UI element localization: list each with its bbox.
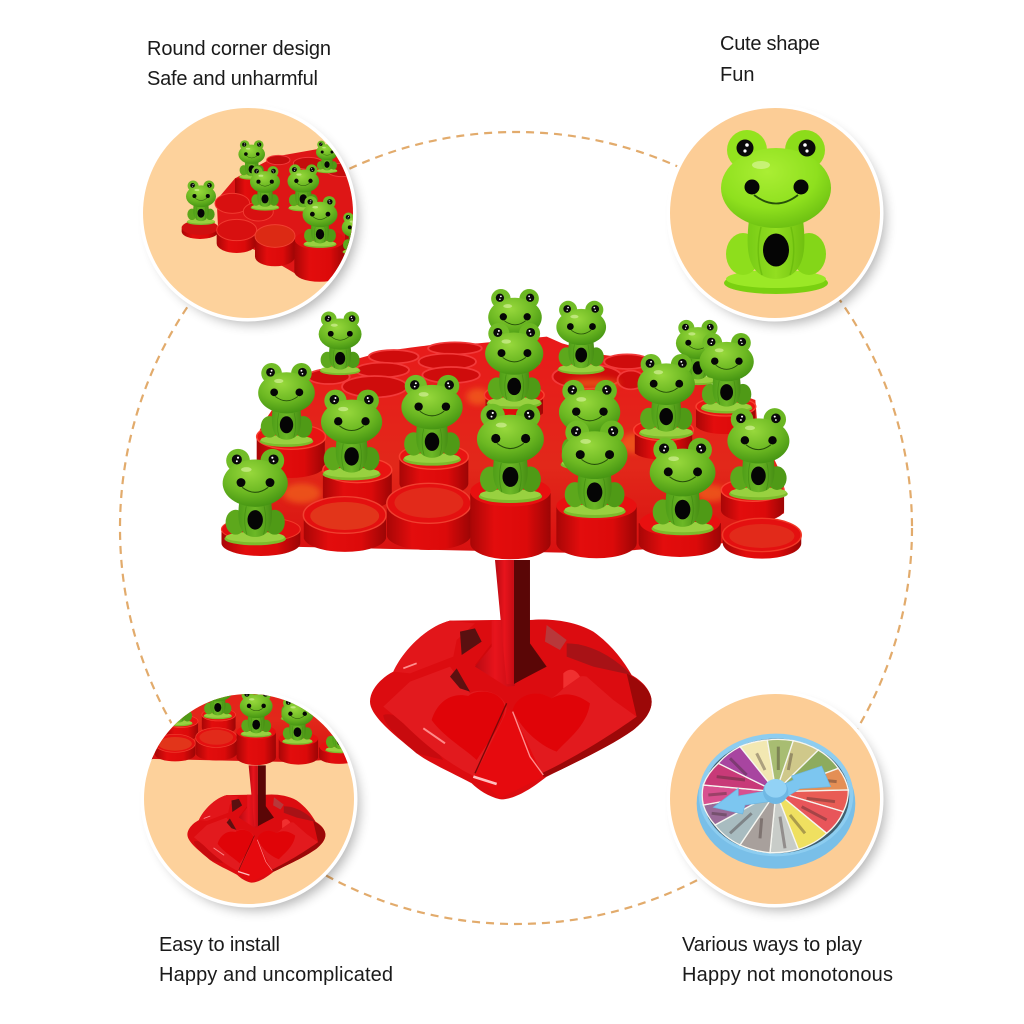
- caption: top right: Cute shape: [720, 33, 820, 55]
- front row cups: [221, 528, 300, 556]
- caption: top left: Safe and unharmful: [147, 68, 318, 90]
- caption: bottom right: Happy not monotonous: [682, 964, 893, 986]
- inset: various ways to play, spinner wheel: [666, 690, 885, 910]
- red honeycomb tray: [221, 337, 801, 559]
- caption: bottom right: Various ways to play: [682, 934, 862, 956]
- left heart panel: [383, 667, 507, 777]
- inset: round corner design: [140, 104, 370, 324]
- frogs on the tray: [223, 289, 789, 545]
- tray close-up: [182, 147, 362, 282]
- small frogs: [186, 140, 370, 255]
- back cups: [308, 342, 650, 397]
- middle cups: [257, 437, 325, 478]
- right heart: [513, 694, 590, 752]
- heart base: [370, 560, 652, 799]
- caption: top right: [720, 33, 820, 86]
- wedge label smudges: [708, 747, 837, 848]
- caption: bottom left: Easy to install: [159, 934, 280, 956]
- left heart: [432, 692, 505, 760]
- pointer arrow: [713, 766, 831, 814]
- inset: cute shape single frog: [666, 104, 885, 324]
- caption: top right: Fun: [720, 64, 754, 86]
- orange reflections: [283, 378, 729, 503]
- right heart panel: [512, 676, 637, 773]
- wheel rim: [697, 738, 855, 869]
- inset: easy to install, whole toy: [144, 694, 366, 917]
- coloured wedges: [702, 739, 848, 853]
- caption: top left: [147, 38, 331, 90]
- caption: bottom left: [159, 934, 393, 986]
- hub: [763, 779, 788, 804]
- dashed connecting circle: [120, 132, 912, 924]
- caption: bottom left: Happy and uncomplicated: [159, 964, 393, 986]
- central product: frog balance tree: [221, 289, 801, 799]
- caption: bottom right: [682, 934, 893, 986]
- caption: top left: Round corner design: [147, 38, 331, 60]
